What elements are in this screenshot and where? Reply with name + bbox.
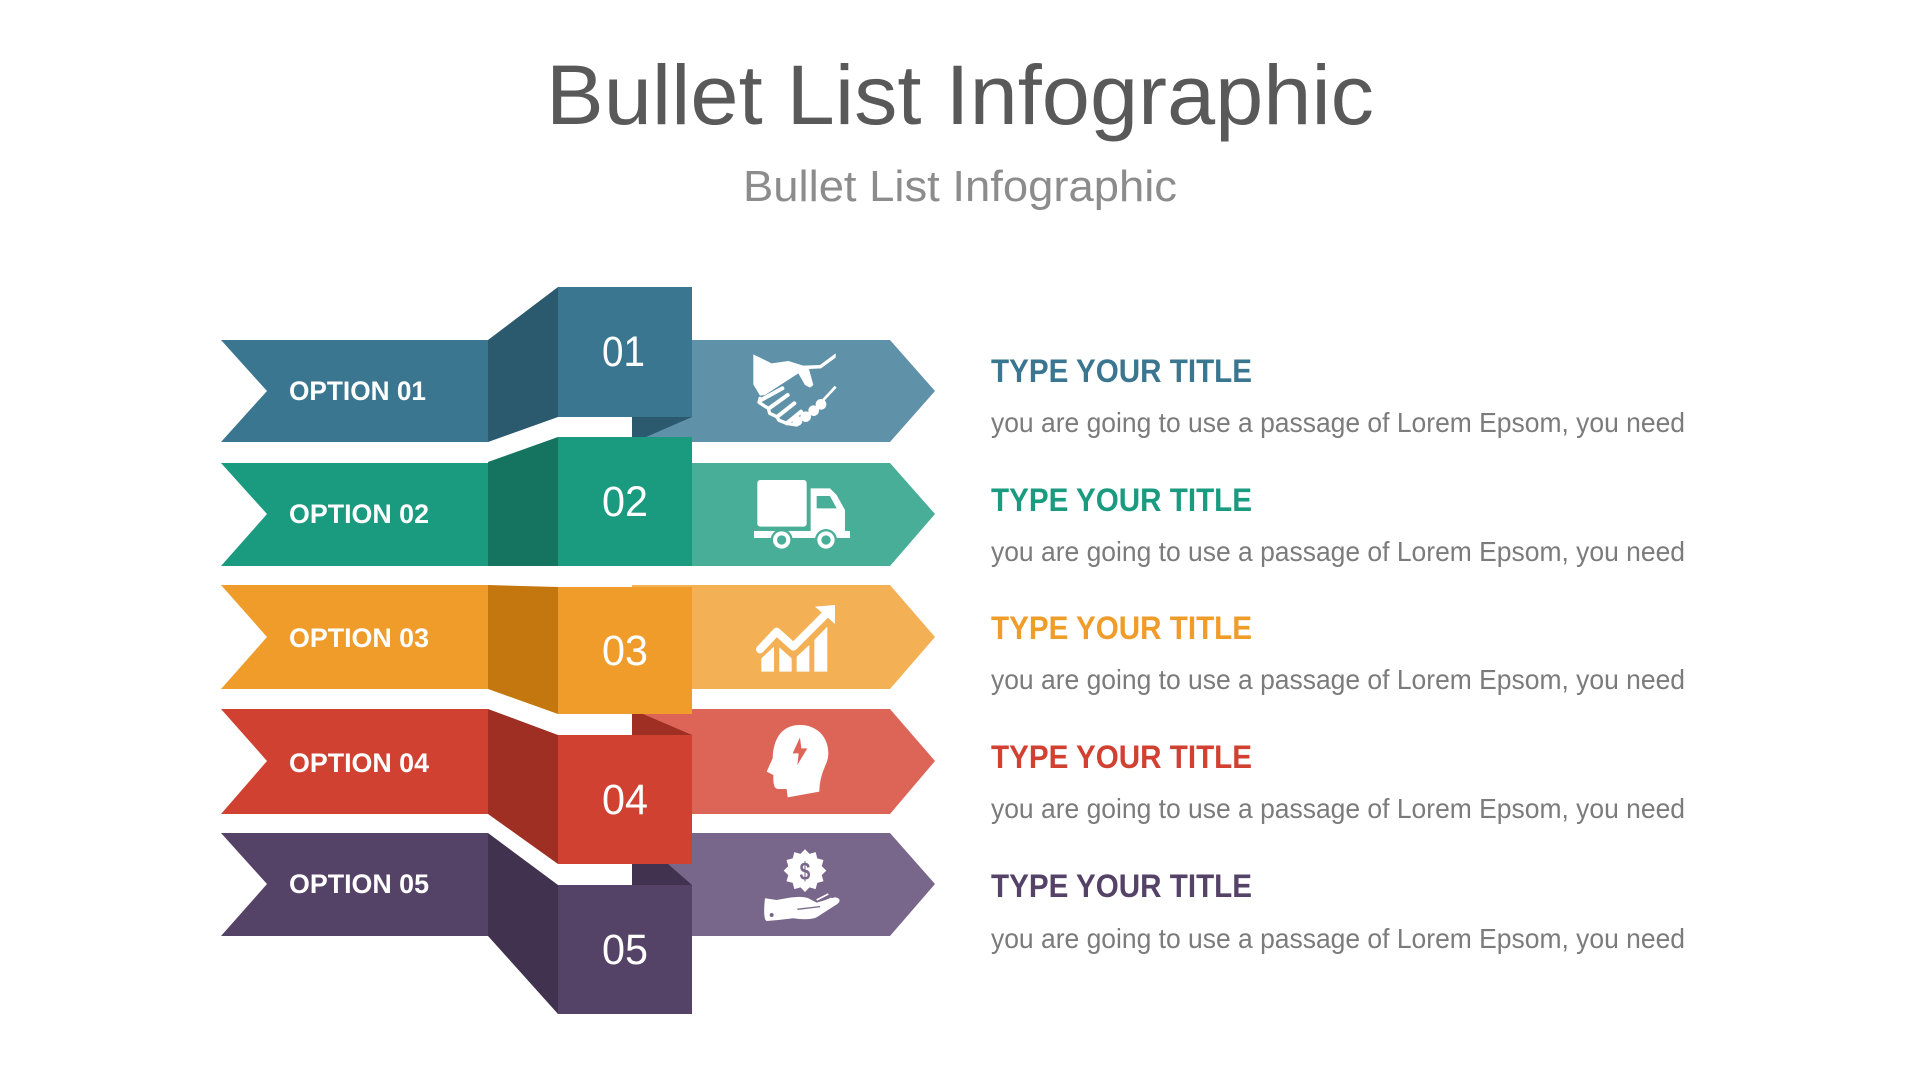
option 04 ribbon: 04: [602, 776, 648, 824]
option 03 ribbon: [221, 585, 935, 714]
text block 02: you are going to use a passage of Lorem Epsom, you need: [991, 536, 1685, 567]
option 05 ribbon: OPTION 05: [289, 869, 429, 899]
text block 03: TYPE YOUR TITLE: [991, 610, 1252, 646]
icon: handshake: [753, 353, 836, 426]
text block 01: [991, 353, 1685, 438]
text block 02: TYPE YOUR TITLE: [991, 482, 1252, 518]
icon: head with lightning bolt: [767, 725, 828, 797]
text block 01: you are going to use a passage of Lorem Epsom, you need: [991, 407, 1685, 438]
option 04 ribbon: [221, 709, 935, 864]
text block 03: [991, 610, 1685, 695]
option 03 ribbon: 03: [602, 627, 648, 675]
icon: growth chart: [760, 605, 835, 672]
option 04 ribbon: OPTION 04: [289, 748, 429, 778]
text block 04: [991, 739, 1685, 824]
option 02 ribbon: [221, 437, 935, 566]
text block 05: [991, 868, 1685, 954]
text block 04: you are going to use a passage of Lorem Epsom, you need: [991, 793, 1685, 824]
option 05 ribbon: [221, 833, 935, 1014]
subtitle: Bullet List Infographic: [743, 162, 1177, 211]
option 01 ribbon: 01: [602, 328, 645, 376]
text block 01: TYPE YOUR TITLE: [991, 353, 1252, 389]
text block 04: TYPE YOUR TITLE: [991, 739, 1252, 775]
text block 02: [991, 482, 1685, 567]
icon: hand holding money: $: [800, 858, 811, 885]
option 05 ribbon: 05: [602, 926, 648, 974]
text block 05: you are going to use a passage of Lorem Epsom, you need: [991, 923, 1685, 954]
title: Bullet List Infographic: [546, 48, 1374, 142]
icon: truck: [754, 480, 850, 551]
option 03 ribbon: OPTION 03: [289, 623, 429, 653]
option 02 ribbon: 02: [602, 478, 648, 526]
option 01 ribbon: [221, 287, 935, 442]
text block 05: TYPE YOUR TITLE: [991, 868, 1252, 904]
option 01 ribbon: OPTION 01: [289, 376, 426, 406]
icon: hand holding money: [764, 849, 840, 921]
text block 03: you are going to use a passage of Lorem Epsom, you need: [991, 664, 1685, 695]
option 02 ribbon: OPTION 02: [289, 499, 429, 529]
